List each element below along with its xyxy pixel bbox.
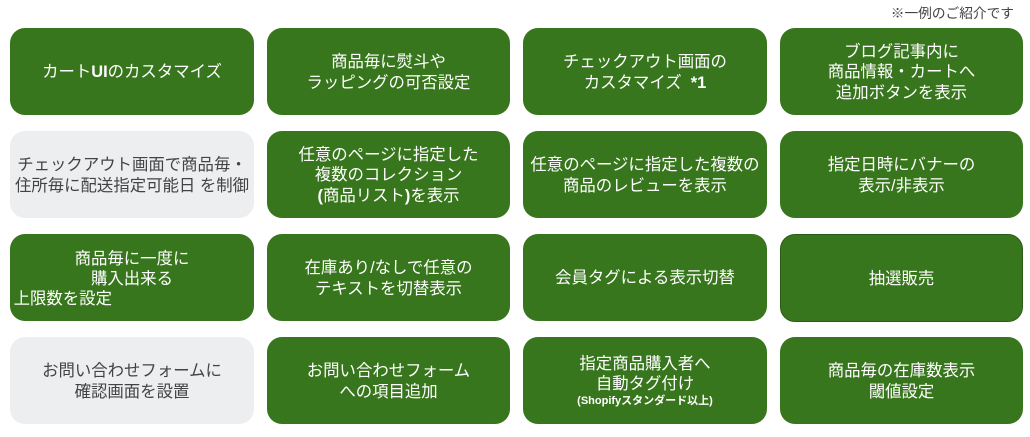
feature: delivery date control (grey) [10, 131, 254, 218]
feature: product info in blog posts: ブログ記事内に [844, 43, 959, 61]
feature: auto tagging for buyers: 指定商品購入者へ [579, 355, 711, 373]
feature: collections on any page [267, 131, 510, 218]
feature: lottery sales: 抽選販売 [869, 270, 934, 288]
feature: reviews on any page: 商品のレビューを表示 [563, 176, 727, 194]
feature: contact form confirmation (grey): お問い合わせフォームに [42, 362, 222, 380]
feature: stock-based text switching: 在庫あり/なしで任意の [305, 259, 472, 277]
feature: product info in blog posts: 商品情報・カートへ [828, 63, 975, 81]
feature: stock-based text switching: テキストを切替表示 [315, 280, 462, 298]
feature: product info in blog posts: 追加ボタンを表示 [836, 84, 967, 102]
feature: contact form confirmation (grey): 確認画面を設置 [75, 382, 189, 400]
feature: cart UI customization [10, 28, 254, 115]
feature: lottery sales [780, 234, 1023, 322]
feature: cart UI customization: カートUIのカスタマイズ [42, 63, 222, 81]
feature: contact form confirmation (grey) [10, 337, 254, 424]
feature: stock display threshold: 閾値設定 [869, 382, 934, 400]
feature: purchase limit per product [10, 234, 254, 321]
feature: delivery date control (grey): チェックアウト画面で商品毎・ [17, 156, 247, 174]
feature: scheduled banner: 表示/非表示 [858, 176, 945, 194]
feature: contact form fields [267, 337, 510, 424]
feature: reviews on any page: 任意のページに指定した複数の [530, 156, 760, 174]
feature: contact form fields: お問い合わせフォーム [307, 362, 470, 380]
feature: stock display threshold: 商品毎の在庫数表示 [828, 362, 975, 380]
feature: delivery date control (grey): 住所毎に配送指定可能日 を制御 [15, 176, 249, 194]
note: examples only: ※一例のご紹介です [891, 6, 1014, 21]
feature: noshi and wrapping setting: 商品毎に熨斗や [331, 53, 446, 71]
feature: collections on any page: (商品リスト)を表示 [317, 187, 460, 205]
feature: auto tagging for buyers: 自動タグ付け [596, 375, 694, 393]
feature: auto tagging for buyers [523, 337, 767, 424]
feature: product info in blog posts [780, 28, 1023, 115]
feature: member tag display switching: 会員タグによる表示切替 [555, 269, 735, 287]
feature: noshi and wrapping setting [267, 28, 510, 115]
feature: noshi and wrapping setting: ラッピングの可否設定 [307, 74, 470, 92]
feature: checkout customization: カスタマイズ *1 [584, 74, 706, 92]
feature: purchase limit per product: 購入出来る [91, 270, 173, 288]
feature: purchase limit per product: 上限数を設定 [14, 290, 112, 308]
feature: contact form fields: への項目追加 [339, 382, 438, 400]
feature: scheduled banner: 指定日時にバナーの [828, 156, 975, 174]
feature: checkout customization: チェックアウト画面の [563, 53, 727, 71]
feature: checkout customization [523, 28, 767, 115]
feature: purchase limit per product: 商品毎に一度に [75, 250, 189, 268]
feature: reviews on any page [523, 131, 767, 218]
feature: auto tagging for buyers: (Shopifyスタンダード以上) [577, 395, 713, 407]
feature: stock display threshold [780, 337, 1023, 424]
feature: member tag display switching [523, 234, 767, 321]
feature: collections on any page: 任意のページに指定した [299, 146, 478, 164]
feature: collections on any page: 複数のコレクション [315, 166, 462, 184]
feature: scheduled banner [780, 131, 1023, 218]
feature: stock-based text switching [267, 234, 510, 321]
